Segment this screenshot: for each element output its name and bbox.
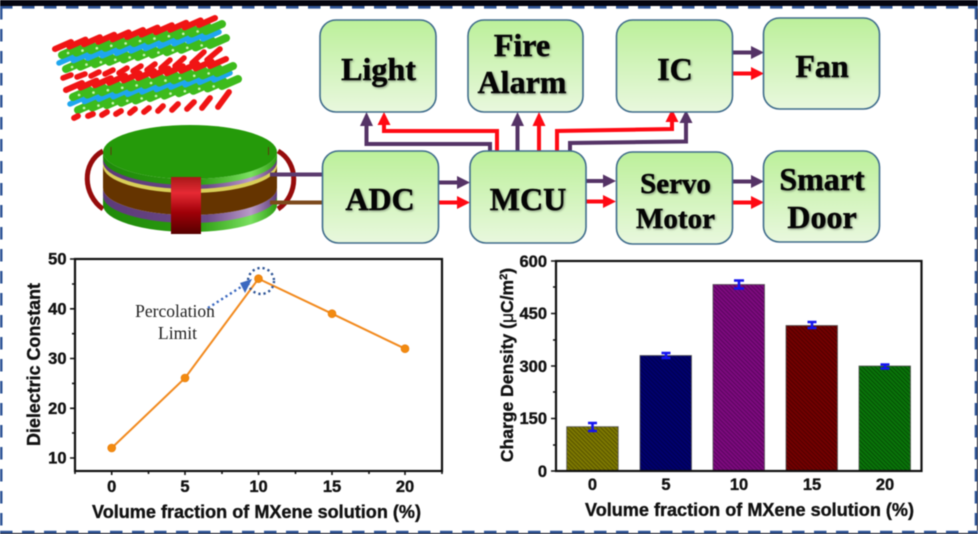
percolation circle	[248, 268, 274, 294]
arrows: MCU to Light	[360, 112, 497, 151]
block: MCU: MCU	[490, 181, 566, 217]
x axis tick labels: 15	[323, 478, 341, 496]
block: Light: Light	[341, 51, 416, 87]
x axis tick labels: 10	[249, 478, 268, 496]
block: ADC	[322, 151, 438, 243]
MXene layered structure	[55, 18, 238, 118]
block: Fire Alarm: Alarm	[478, 64, 567, 100]
y axis tick labels: 50	[48, 250, 66, 268]
bar chart: charge density	[497, 253, 922, 520]
block: Fire Alarm: Fire	[494, 27, 550, 63]
block: Smart Door: Smart	[779, 161, 865, 197]
block: Fan	[764, 18, 880, 109]
y axis tick labels	[519, 253, 547, 481]
block: IC	[616, 20, 732, 112]
bottom green disc	[103, 195, 277, 232]
x axis tick labels: 10	[730, 476, 748, 494]
block: Smart Door	[764, 151, 880, 242]
x axis tick labels: 20	[396, 478, 414, 496]
block: ADC: ADC	[345, 181, 415, 217]
y axis tick labels	[48, 250, 66, 468]
y axis title: Charge Density (μC/m	[497, 280, 517, 462]
bars	[567, 284, 910, 471]
data line	[112, 279, 405, 448]
triboelectric device	[87, 125, 323, 234]
y axis tick labels: 150	[519, 410, 547, 428]
y axis tick labels: 0	[538, 463, 547, 481]
line chart: dielectric constant	[24, 250, 442, 522]
x axis tick labels: 0	[107, 478, 116, 496]
x axis title: Volume fraction of MXene solution (%)	[92, 502, 421, 522]
arrows: ADC to MCU	[438, 176, 470, 209]
percolation label: Limit	[158, 323, 197, 343]
y axis tick labels: 20	[48, 400, 66, 418]
percolation label: Percolation	[135, 301, 215, 321]
bar chart frame and ticks	[551, 261, 922, 471]
x axis tick labels: 5	[180, 478, 190, 496]
arrows: MCU to Servo Motor	[584, 174, 616, 208]
y axis tick labels: 300	[519, 358, 547, 376]
contact ticks	[111, 147, 268, 155]
block: Light	[320, 20, 436, 112]
percolation label	[135, 301, 215, 343]
red strap back loops	[87, 151, 294, 209]
arrows: IC to Fan	[732, 46, 764, 80]
lower purple layer	[103, 188, 277, 223]
x axis tick labels: 20	[876, 476, 894, 494]
x axis tick labels	[107, 478, 414, 496]
block: Servo Motor: Servo	[640, 168, 711, 200]
x axis tick labels: 0	[588, 476, 597, 494]
top green side	[103, 152, 277, 185]
block: IC: IC	[657, 51, 693, 87]
y axis tick labels: 30	[48, 350, 66, 368]
arrows: Servo Motor to Smart Door	[732, 175, 764, 209]
y axis title: 2	[498, 274, 510, 280]
y axis tick labels: 450	[519, 305, 547, 323]
x axis tick labels	[588, 476, 894, 494]
x axis tick labels: 15	[803, 476, 821, 494]
data points	[108, 275, 409, 452]
wires	[270, 172, 323, 176]
arrows: MCU to Fire Alarm	[511, 112, 546, 151]
x axis tick labels: 5	[661, 476, 671, 494]
brown layer	[103, 160, 277, 215]
percolation arrow	[208, 279, 252, 308]
block: Servo Motor: Motor	[636, 203, 715, 235]
block: Fire Alarm	[468, 20, 583, 112]
y axis tick labels: 40	[48, 300, 66, 318]
block: Fan: Fan	[795, 48, 849, 84]
y axis title: Dielectric Constant	[24, 283, 44, 446]
y axis title: )	[497, 268, 517, 274]
chart frame and ticks	[70, 259, 442, 475]
arrows: MCU to IC	[557, 109, 692, 151]
x axis title: Volume fraction of MXene solution (%)	[585, 500, 914, 520]
yellow layer	[103, 160, 277, 193]
upper purple layer	[103, 157, 277, 189]
top green face	[103, 125, 277, 179]
block: Servo Motor	[616, 152, 732, 244]
front red strap	[171, 177, 201, 234]
block: MCU	[470, 151, 586, 243]
block: Smart Door: Door	[787, 199, 857, 235]
y axis tick labels: 10	[48, 450, 66, 468]
y axis tick labels: 600	[519, 253, 547, 271]
error bars	[588, 280, 890, 431]
